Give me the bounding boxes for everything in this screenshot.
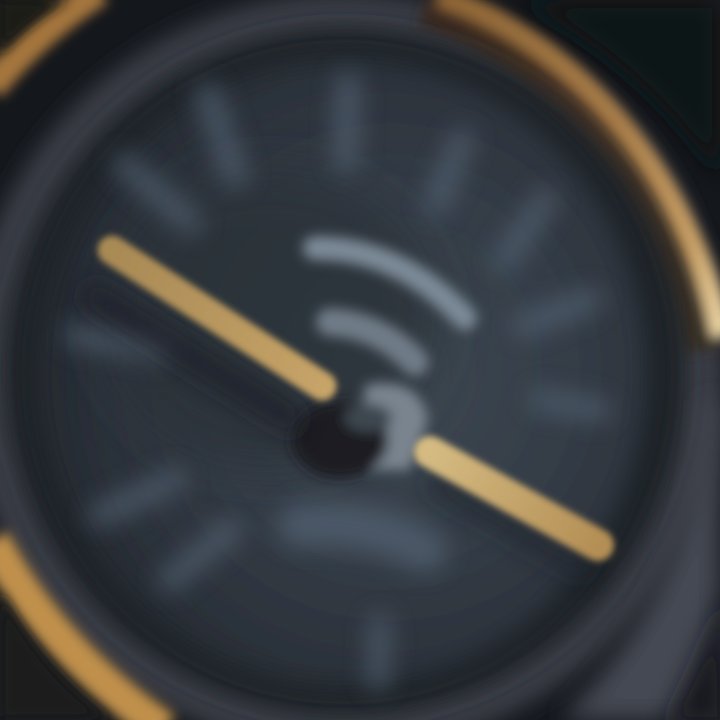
dial face [37, 56, 647, 688]
dial inner shading [100, 170, 440, 470]
bottom right case edge [560, 400, 720, 720]
needle shadow [85, 290, 300, 425]
wifi-like arcs [315, 248, 465, 362]
needle hub [292, 383, 428, 478]
gold bezel: bottom left arc [0, 540, 165, 720]
gold bezel: top left arc [0, 0, 100, 88]
top left corner [0, 0, 70, 55]
top right dark corner [515, 0, 720, 180]
needle shadow right [430, 480, 590, 570]
bottom right corner [665, 590, 720, 720]
dial hour markers [75, 85, 600, 680]
bottom left corner [0, 590, 110, 720]
gold needle: left segment [112, 250, 322, 386]
gold needle: right segment [430, 452, 598, 545]
gold bezel: top right arc [425, 0, 720, 350]
